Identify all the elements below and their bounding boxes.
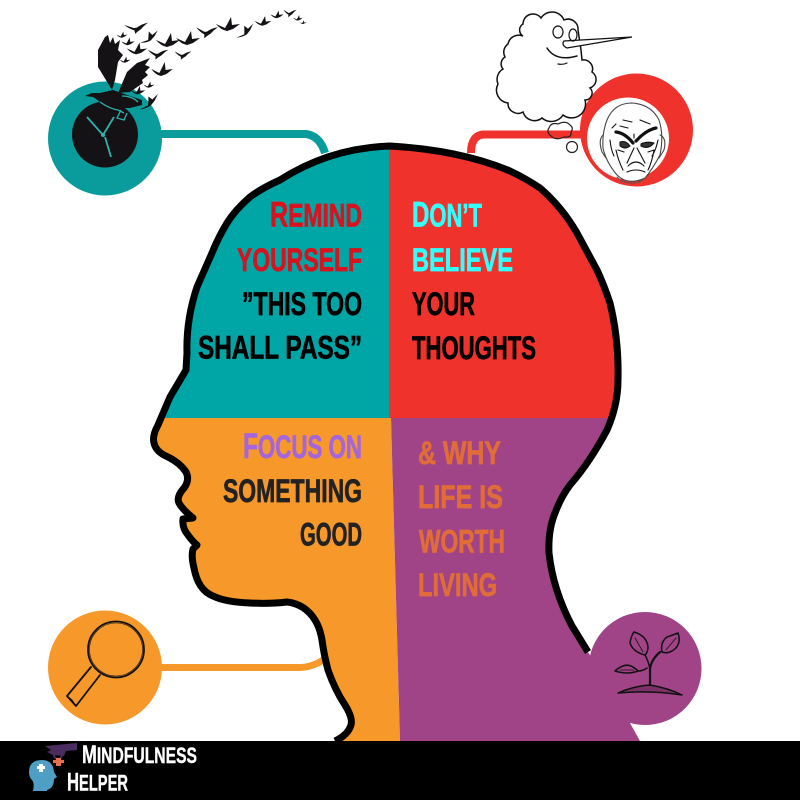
text: and why life is worth living <box>418 435 505 603</box>
quadrant: orange <box>140 418 400 741</box>
small thought bubbles <box>548 122 572 139</box>
footer bar <box>0 741 800 800</box>
icon: magnifying glass <box>67 622 144 706</box>
footer text: Mindfulness Helper: HELPER <box>67 768 128 796</box>
quadrant: purple <box>391 418 640 741</box>
circle: red face badge <box>580 74 693 186</box>
icon: angry face <box>600 103 665 183</box>
text: remind yourself <box>198 196 362 366</box>
connector: red <box>471 134 582 153</box>
text: remind yourself: SHALL PASS” <box>198 330 362 366</box>
hand <box>45 743 77 756</box>
quadrant: red <box>389 140 629 418</box>
circle: orange magnifier badge <box>48 610 162 724</box>
text: don't believe your thoughts: DON’T <box>412 196 482 234</box>
puzzle piece orange <box>53 758 64 766</box>
text: focus on something good: FOCUS ON <box>243 427 362 466</box>
logo: head with puzzle pieces <box>29 743 77 791</box>
icon: big bird and flock <box>85 10 306 120</box>
icon: pinocchio thought cloud <box>496 12 632 153</box>
text: remind yourself: ”THIS TOO <box>242 286 362 322</box>
text: and why life is worth living: & WHY <box>418 435 501 471</box>
text: don't believe your thoughts: YOUR <box>412 286 475 322</box>
circle: purple plant badge <box>588 612 702 725</box>
text: focus on something good: GOOD <box>300 516 362 552</box>
text: and why life is worth living: WORTH <box>419 524 505 560</box>
text: don't believe your thoughts: BELIEVE <box>412 242 513 278</box>
text: and why life is worth living: LIFE IS <box>418 479 503 515</box>
footer text: Mindfulness Helper: MINDFULNESS <box>82 741 197 769</box>
text: focus on something good: SOMETHING <box>223 473 362 509</box>
eyes and smile <box>547 26 577 64</box>
connector: orange <box>160 658 326 668</box>
text: don't believe your thoughts <box>412 196 536 366</box>
footer text: Mindfulness Helper <box>67 741 197 796</box>
head with four coloured quadrants <box>140 140 640 741</box>
puzzle piece white <box>37 764 45 772</box>
text: remind yourself: REMIND <box>270 196 362 234</box>
circle: teal clock badge <box>48 82 162 196</box>
text: remind yourself: YOURSELF <box>237 242 362 278</box>
connector: teal <box>160 134 325 153</box>
icon: plant <box>615 632 682 695</box>
text: don't believe your thoughts: THOUGHTS <box>412 330 536 366</box>
head outline <box>154 146 618 741</box>
text: focus on something good <box>223 427 362 552</box>
logo head <box>29 760 57 791</box>
text: and why life is worth living: LIVING <box>418 567 497 603</box>
nose <box>563 37 632 48</box>
icon: clock <box>72 102 138 168</box>
quadrant: teal <box>164 150 389 418</box>
